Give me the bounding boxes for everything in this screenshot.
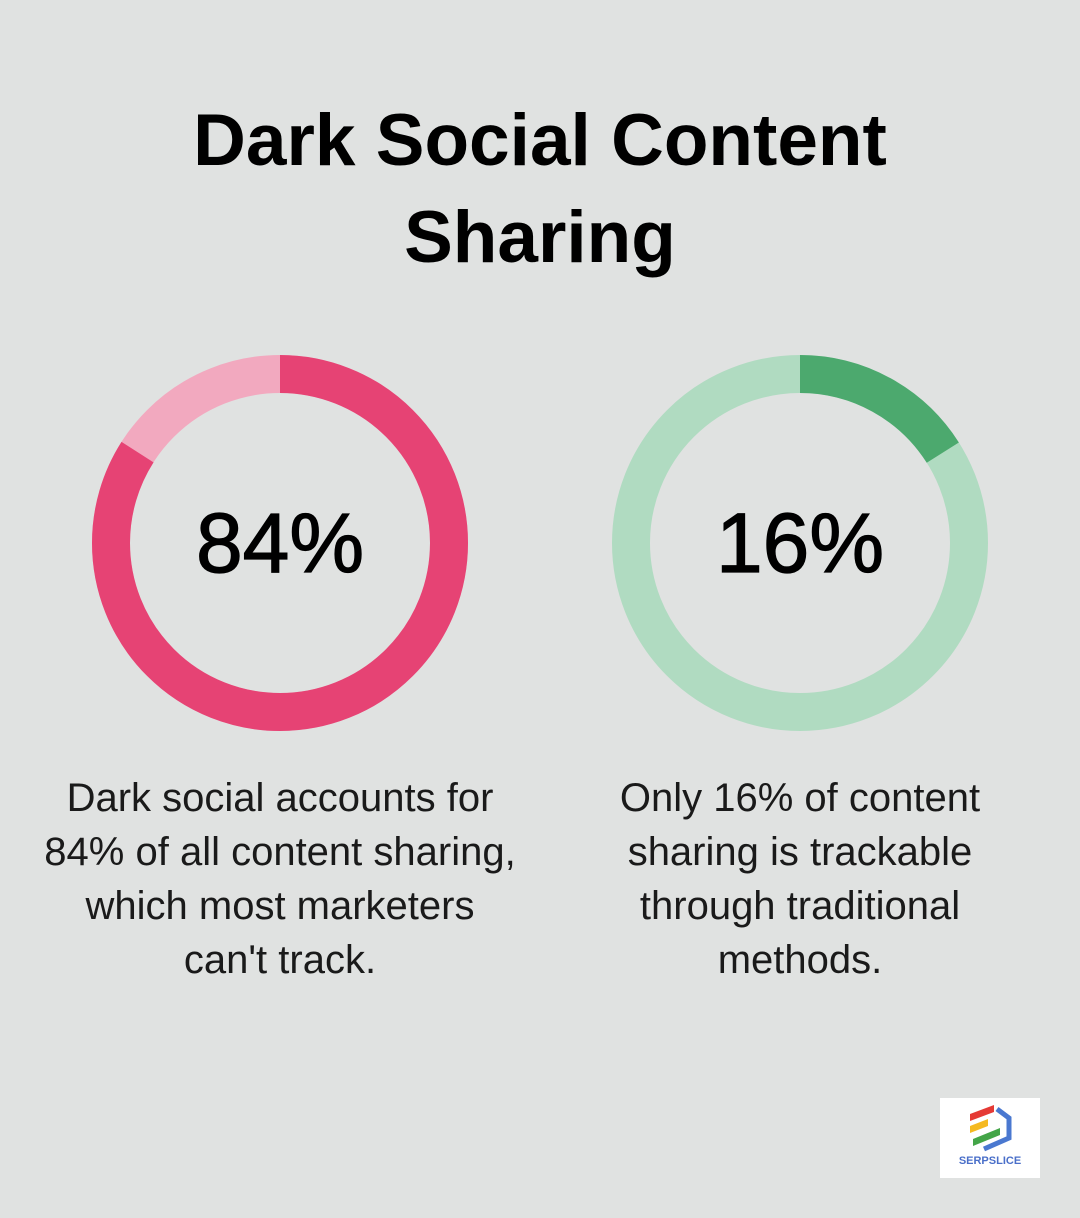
text: right caption: sharing is trackable (628, 830, 972, 874)
title: Sharing (404, 197, 676, 278)
title (193, 100, 887, 278)
text: right caption: methods. (718, 938, 882, 982)
text: left caption: 84% of all content sharing, (44, 830, 516, 874)
chart: 16% donut (612, 355, 988, 731)
text: right caption: Only 16% of content (620, 776, 980, 820)
text: right caption (620, 776, 980, 982)
text: left caption: which most marketers (86, 884, 474, 928)
logo: SERPSLICE (940, 1098, 1040, 1178)
text: left caption: can't track. (184, 938, 376, 982)
chart: 16% donut: 16% (716, 496, 884, 590)
chart: 84% donut (92, 355, 468, 731)
logo: SERPSLICE: SERPSLICE (959, 1155, 1021, 1167)
chart: 84% donut: 84% (196, 496, 364, 590)
text: left caption (44, 776, 516, 982)
title: Dark Social Content (193, 100, 887, 181)
text: left caption: Dark social accounts for (67, 776, 493, 820)
text: right caption: through traditional (640, 884, 960, 928)
